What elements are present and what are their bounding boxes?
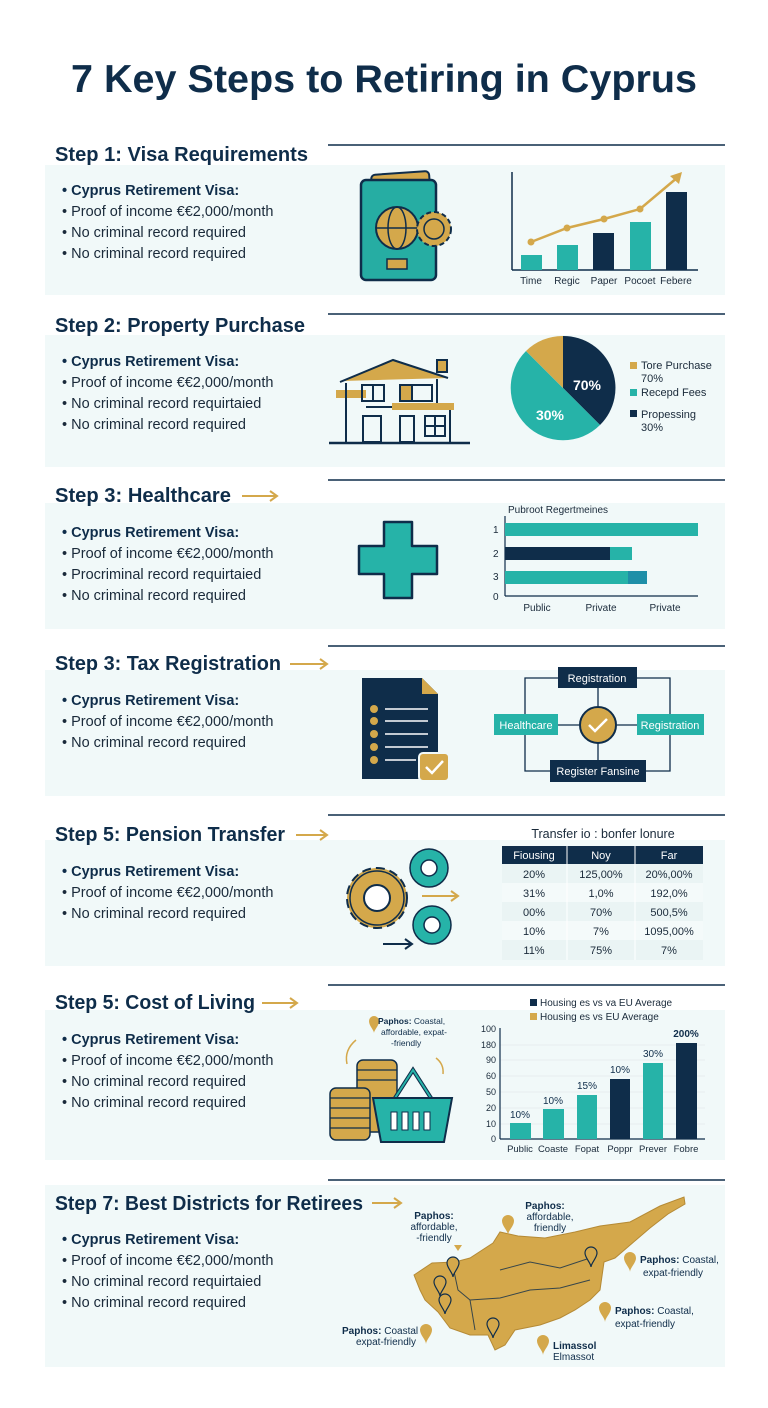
panel: step 2 property purchase <box>55 315 712 443</box>
chart: cost vs EU bar chart: 10% <box>510 1110 530 1121</box>
diagram: registration flow: Register Fansine <box>556 766 640 778</box>
chart: visa bar chart: Regic <box>554 276 580 287</box>
chart: cost vs EU bar chart: Coaste <box>538 1144 568 1155</box>
heading: step 3 healthcare: Step 3: Healthcare <box>55 485 231 507</box>
map: cyprus: Limassol <box>553 1341 597 1352</box>
text block: step 6 bullets: • No criminal record required <box>62 1095 246 1111</box>
chart: cost vs EU bar chart: Fopat <box>575 1144 600 1155</box>
arrow: healthcare <box>242 491 277 501</box>
table: transfer: 31% <box>523 888 545 900</box>
text block: step 5 bullets: • No criminal record required <box>62 906 246 922</box>
chart: cost vs EU bar chart: 50 <box>486 1087 496 1097</box>
chart: cost vs EU bar chart: 100 <box>481 1024 496 1034</box>
map: cyprus: Paphos: Coastal, <box>640 1255 719 1266</box>
chart: cost vs EU bar chart: Prever <box>639 1144 667 1155</box>
table: transfer <box>502 827 703 960</box>
text block: step 5 bullets: • Cyprus Retirement Visa: <box>62 864 239 880</box>
text block: step 4 bullets <box>62 693 273 751</box>
text block: step 7 bullets: • No criminal record required <box>62 1295 246 1311</box>
chart: healthcare horizontal bars: 0 <box>493 592 499 603</box>
icon: passport <box>361 171 451 280</box>
chart: visa bar chart: Pocoet <box>624 276 656 287</box>
arrow: tax <box>290 659 327 669</box>
table: transfer: Far <box>661 850 678 862</box>
chart: healthcare horizontal bars: 3 <box>493 572 499 583</box>
map: cyprus: expat-friendly <box>643 1268 703 1279</box>
arrow: districts <box>372 1198 401 1208</box>
chart: cost vs EU bar chart: 30% <box>643 1049 663 1060</box>
text block: step 7 bullets <box>62 1232 273 1311</box>
map: cyprus: Paphos: <box>414 1211 454 1222</box>
text block: step 3 bullets: • No criminal record required <box>62 588 246 604</box>
table: transfer: 125,00% <box>579 869 623 881</box>
chart: cost vs EU bar chart: 10 <box>486 1119 496 1129</box>
chart: cost vs EU bar chart: 90 <box>486 1055 496 1065</box>
table: transfer: 75% <box>590 945 612 957</box>
text block: step 1 bullets: • Proof of income €€2,000/month <box>62 204 273 220</box>
text block: step 7 bullets: • Cyprus Retirement Visa: <box>62 1232 239 1248</box>
chart: cost vs EU bar chart: Housing es vs EU Average <box>540 1012 659 1023</box>
chart: healthcare horizontal bars: Private <box>585 603 617 614</box>
chart: cost vs EU bar chart: 0 <box>491 1134 496 1144</box>
heading: tax registration: Step 3: Tax Registration <box>55 653 281 675</box>
map: cyprus: Paphos: <box>525 1201 565 1212</box>
text block: step 1 bullets: • Cyprus Retirement Visa: <box>62 183 239 199</box>
map: cyprus: friendly <box>534 1223 566 1234</box>
chart: cost vs EU bar chart: 10% <box>543 1096 563 1107</box>
heading: pension transfer: Step 5: Pension Transfer <box>55 824 285 846</box>
text block: step 6 bullets <box>62 1032 273 1111</box>
legend: pie: 30% <box>641 422 663 434</box>
chart: healthcare horizontal bars <box>493 505 698 614</box>
chart: property pie chart: 30% <box>536 407 565 423</box>
legend: pie <box>630 360 712 434</box>
text block: step 6 bullets: • Proof of income €€2,000/month <box>62 1053 273 1069</box>
icon: house <box>329 359 470 443</box>
panel: step 6 cost of living <box>55 992 705 1155</box>
text block: step 7 bullets: • Proof of income €€2,000/month <box>62 1253 273 1269</box>
heading: step 1: Step 1: Visa Requirements <box>55 144 308 166</box>
legend: pie: Recepd Fees <box>641 387 707 399</box>
table: transfer: 500,5% <box>650 907 688 919</box>
chart: cost vs EU bar chart: Housing es vs va EU Average <box>540 998 673 1009</box>
diagram: registration flow: Registration <box>641 720 699 732</box>
chart: visa bar chart: Paper <box>591 276 618 287</box>
map: cyprus <box>342 1197 719 1363</box>
text block: step 1 bullets <box>62 183 273 262</box>
table: transfer: 00% <box>523 907 545 919</box>
table: transfer: 1,0% <box>588 888 614 900</box>
chart: cost vs EU bar chart: 10% <box>610 1065 630 1076</box>
text block: step 4 bullets: • No criminal record required <box>62 735 246 751</box>
table: transfer: 7% <box>661 945 677 957</box>
chart: cost vs EU bar chart: 180 <box>481 1040 496 1050</box>
title: 7 Key Steps to Retiring in Cyprus <box>71 58 697 101</box>
chart: property pie chart <box>511 336 615 440</box>
chart: cost vs EU bar chart: 200% <box>673 1029 699 1040</box>
text block: step 2 bullets: • No criminal record requirtaied <box>62 396 261 412</box>
table: transfer: 70% <box>590 907 612 919</box>
icon: coins and basket: affordable, expat- <box>381 1027 447 1037</box>
legend: pie: 70% <box>641 373 663 385</box>
table: transfer: 20% <box>523 869 545 881</box>
icon: coins and basket: -friendly <box>391 1038 422 1048</box>
map: cyprus: Paphos: Coastal <box>342 1326 418 1337</box>
icon: coins and basket: Paphos: Coastal, <box>378 1016 445 1026</box>
chart: visa bar chart: Time <box>520 276 542 287</box>
text block: step 4 bullets: • Cyprus Retirement Visa: <box>62 693 239 709</box>
panel backgrounds <box>45 165 725 1367</box>
map: cyprus: affordable, <box>526 1212 574 1223</box>
text block: step 3 bullets: • Procriminal record requirtaied <box>62 567 261 583</box>
chart: cost vs EU bar chart: 60 <box>486 1071 496 1081</box>
panel: step 7 best districts <box>55 1193 719 1363</box>
text block: step 3 bullets: • Cyprus Retirement Visa: <box>62 525 239 541</box>
chart: healthcare horizontal bars: 2 <box>493 549 499 560</box>
text block: step 2 bullets: • Cyprus Retirement Visa: <box>62 354 239 370</box>
text block: step 3 bullets: • Proof of income €€2,000/month <box>62 546 273 562</box>
panel: step 5 pension transfer <box>55 824 703 960</box>
chart: cost vs EU bar chart: Fobre <box>674 1144 698 1155</box>
map: cyprus: expat-friendly <box>615 1319 675 1330</box>
diagram: registration flow: Healthcare <box>499 720 553 732</box>
chart: visa bar chart <box>512 172 698 287</box>
icon: coins and basket <box>330 1016 452 1142</box>
text block: step 2 bullets <box>62 354 273 433</box>
table: transfer: 192,0% <box>650 888 688 900</box>
text block: step 6 bullets: • Cyprus Retirement Visa: <box>62 1032 239 1048</box>
text block: step 4 bullets: • Proof of income €€2,000/month <box>62 714 273 730</box>
chart: healthcare horizontal bars: 1 <box>493 525 499 536</box>
chart: healthcare horizontal bars: Public <box>523 603 551 614</box>
legend: pie: Propessing <box>641 409 696 421</box>
icon: medical cross <box>359 522 437 598</box>
diagram: registration flow <box>494 667 704 782</box>
arrow: pension <box>296 830 327 840</box>
text block: step 1 bullets: • No criminal record required <box>62 225 246 241</box>
table: transfer: 20%,00% <box>645 869 693 881</box>
arrow: cost <box>262 998 297 1008</box>
table: transfer: Fiousing <box>513 850 555 862</box>
map: cyprus: Paphos: Coastal, <box>615 1306 694 1317</box>
icon: gears <box>347 849 458 949</box>
text block: step 1 bullets: • No criminal record required <box>62 246 246 262</box>
chart: cost vs EU bar chart: 20 <box>486 1103 496 1113</box>
diagram: registration flow: Registration <box>568 673 626 685</box>
heading: cost of living: Step 5: Cost of Living <box>55 992 255 1014</box>
chart: visa bar chart: Febere <box>660 276 692 287</box>
table: transfer: 7% <box>593 926 609 938</box>
text block: step 2 bullets: • No criminal record required <box>62 417 246 433</box>
text block: step 6 bullets: • No criminal record required <box>62 1074 246 1090</box>
map: cyprus: expat-friendly <box>356 1337 416 1348</box>
chart: cost vs EU bar chart: 15% <box>577 1081 597 1092</box>
text block: step 3 bullets <box>62 525 273 604</box>
text block: step 7 bullets: • No criminal record requirtaied <box>62 1274 261 1290</box>
icon: checklist document <box>362 678 449 781</box>
text block: step 5 bullets: • Proof of income €€2,000/month <box>62 885 273 901</box>
chart: healthcare horizontal bars: Private <box>649 603 681 614</box>
chart: cost vs EU bar chart <box>481 998 705 1155</box>
text block: step 2 bullets: • Proof of income €€2,000/month <box>62 375 273 391</box>
panel: step 3 healthcare <box>55 485 698 614</box>
chart: healthcare horizontal bars: Pubroot Regertmeines <box>508 505 608 516</box>
map: cyprus: Elmassot <box>553 1352 594 1363</box>
table: transfer: 10% <box>523 926 545 938</box>
heading: step 2: Step 2: Property Purchase <box>55 315 305 337</box>
table: transfer: 11% <box>523 945 545 957</box>
table: transfer: Transfer io : bonfer lonure <box>531 827 675 841</box>
table: transfer: Noy <box>591 850 611 862</box>
heading: best districts: Step 7: Best Districts for Retirees <box>55 1193 363 1215</box>
chart: property pie chart: 70% <box>573 377 602 393</box>
table: transfer: 1095,00% <box>644 926 694 938</box>
legend: pie: Tore Purchase <box>641 360 712 372</box>
map: cyprus: -friendly <box>416 1233 452 1244</box>
chart: cost vs EU bar chart: Public <box>507 1144 533 1155</box>
panel: step 4 tax registration <box>55 653 704 782</box>
text block: step 5 bullets <box>62 864 273 922</box>
chart: cost vs EU bar chart: Poppr <box>607 1144 633 1155</box>
map: cyprus: affordable, <box>410 1222 458 1233</box>
panel: step 1 visa requirements <box>55 144 698 287</box>
